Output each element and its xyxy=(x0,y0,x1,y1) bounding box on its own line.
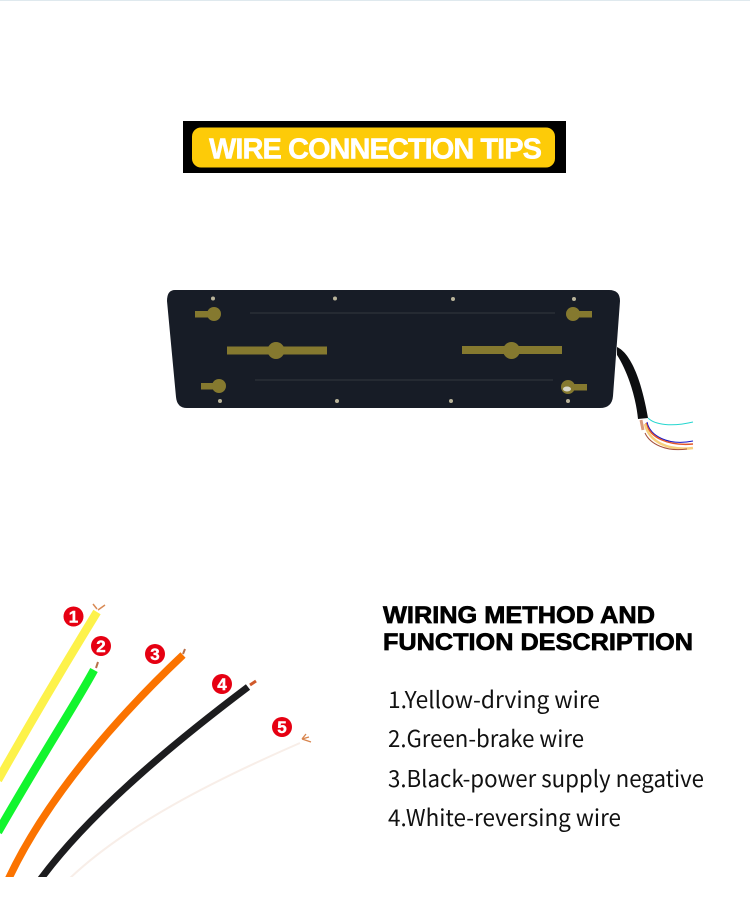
wiring list xyxy=(388,681,704,833)
number badge 4: 4 xyxy=(217,675,227,694)
number badge 1: 1 xyxy=(69,608,78,626)
product photo: rear of LED plate with cable xyxy=(167,290,693,450)
number badge 5: 5 xyxy=(277,718,287,737)
screws xyxy=(211,296,576,403)
number badge 2: 2 xyxy=(96,637,106,656)
mounting slots xyxy=(195,307,592,394)
wire sample illustration xyxy=(0,604,311,880)
back plate xyxy=(167,290,620,408)
wiring list: 2.Green-brake wire xyxy=(388,720,584,754)
title banner xyxy=(183,121,566,173)
wiring list: 3.Black-power supply negative xyxy=(388,760,704,794)
number badge 1 xyxy=(64,606,84,626)
wire 1 yellow xyxy=(0,612,97,780)
wire 3 orange xyxy=(8,655,183,880)
number badge 5 xyxy=(272,717,292,737)
exposed wires xyxy=(641,418,693,450)
wire 2 green xyxy=(0,670,94,832)
number badge 2 xyxy=(91,636,111,656)
number badge 4 xyxy=(212,674,232,694)
section heading: FUNCTION DESCRIPTION xyxy=(383,629,693,656)
wire 5 white xyxy=(68,743,300,880)
number badge 3 xyxy=(145,644,165,664)
wire 4 black xyxy=(40,687,248,880)
number badge 3: 3 xyxy=(150,645,160,664)
section heading: WIRING METHOD AND xyxy=(383,602,655,629)
section heading xyxy=(383,602,693,656)
cable xyxy=(617,347,648,419)
bare copper tips xyxy=(93,604,311,742)
title banner: WIRE CONNECTION TIPS xyxy=(209,134,542,166)
wiring list: 1.Yellow-drving wire xyxy=(388,681,600,715)
wiring list: 4.White-reversing wire xyxy=(388,799,621,833)
